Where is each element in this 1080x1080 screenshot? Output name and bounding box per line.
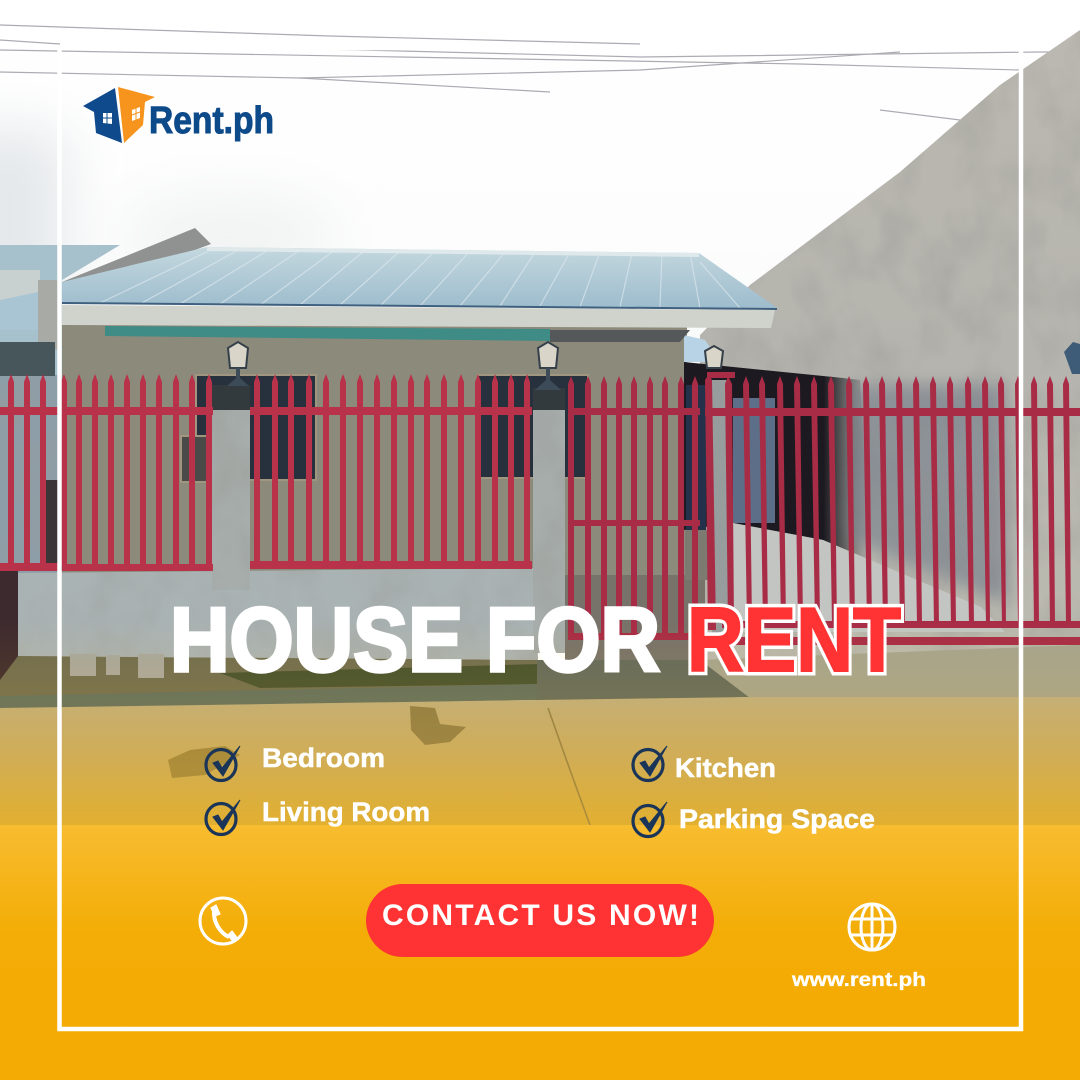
title: RENT: RENT: [687, 590, 901, 691]
icon: phone: [200, 898, 246, 944]
left fence panels: [0, 374, 213, 571]
website url: www.rent.ph: [791, 970, 926, 991]
main sliding gate: [700, 372, 1080, 645]
photo: house with red fence: [0, 0, 1080, 825]
title: [170, 590, 901, 691]
feature list: [206, 743, 875, 836]
button: contact us now: [366, 884, 714, 957]
puddles and crack: [168, 706, 590, 825]
sky: [0, 0, 1080, 400]
lower concrete wall: [0, 568, 538, 688]
wall lamps: [227, 342, 1080, 390]
feature: Bedroom: [206, 743, 385, 780]
title: RENT: RENT: [687, 590, 901, 691]
feature: Parking Space: [633, 802, 875, 836]
street: [0, 697, 1080, 825]
feature: Bedroom: Bedroom: [262, 743, 385, 773]
side gate: [568, 376, 700, 640]
icon: globe: [849, 904, 895, 950]
tarp and dark carport behind gate: [684, 335, 1010, 635]
windows: [181, 375, 588, 482]
concrete boundary wall: [700, 30, 1080, 660]
feature: Parking Space: Parking Space: [679, 804, 875, 834]
power lines: [0, 25, 1080, 163]
concrete pillars: [212, 385, 565, 653]
feature: Kitchen: [633, 746, 776, 783]
neighbouring building: [0, 228, 211, 660]
feature: Living Room: Living Room: [262, 797, 430, 827]
logo: Rent.ph: [83, 87, 274, 143]
gravel under side gate: [565, 575, 705, 665]
warm fade over photo: [0, 620, 1080, 825]
yellow footer panel: [0, 825, 1080, 1080]
feature: Living Room: [206, 797, 430, 834]
button: contact us now: CONTACT US NOW!: [382, 899, 699, 932]
centre fence panel: [250, 374, 532, 569]
title: HOUSE FOR: HOUSE FOR: [170, 590, 660, 691]
logo house icon: [83, 87, 155, 143]
dirt, grass and curb: [0, 645, 1080, 710]
feature: Kitchen: Kitchen: [675, 753, 776, 783]
eave and teal awning: [62, 305, 775, 342]
logo wordmark: Rent.ph: [149, 100, 274, 142]
roof: [62, 247, 777, 309]
house wall: [62, 325, 687, 605]
